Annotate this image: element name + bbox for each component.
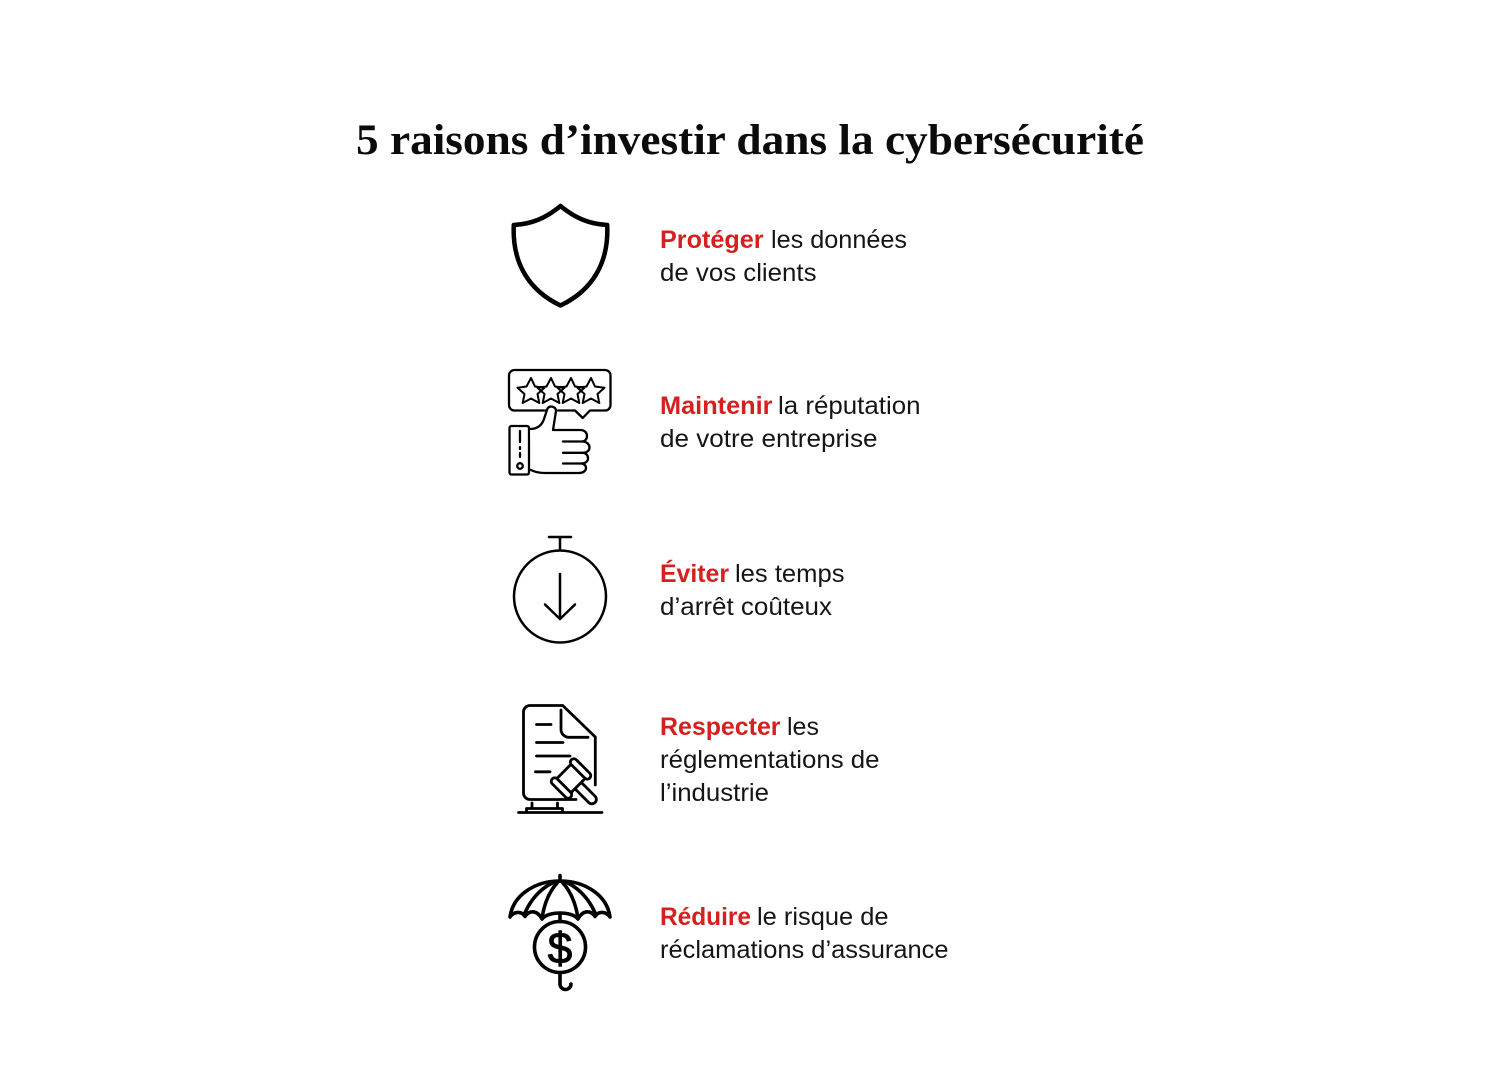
- text: avoid downtime: les temps: [735, 560, 844, 588]
- text: protect customer data: de vos clients: [660, 259, 816, 287]
- icon: legal document with gavel: [518, 706, 607, 815]
- text: protect customer data: les données: [771, 226, 907, 254]
- text: avoid downtime: Éviter: [660, 559, 729, 588]
- text: maintain reputation: la réputation: [778, 392, 920, 420]
- icon part: rating stars: [518, 378, 604, 403]
- text: comply with regulations: les: [787, 713, 819, 741]
- icon: stopwatch with down arrow: [514, 537, 606, 642]
- icon part: shirt cuff: [510, 426, 529, 474]
- text: avoid downtime: [660, 559, 844, 621]
- icon part: umbrella canopy: [510, 876, 610, 919]
- text: protect customer data: [660, 226, 907, 287]
- icon part: umbrella handle: [560, 973, 571, 990]
- text: reduce insurance claims: réclamations d’assurance: [660, 936, 948, 964]
- text: reduce insurance claims: Réduire: [660, 903, 751, 931]
- icon part: gavel: [550, 757, 607, 815]
- icon part: speech bubble: [509, 370, 610, 418]
- icon: umbrella over dollar coin: [510, 876, 610, 990]
- text: maintain reputation: Maintenir: [660, 392, 773, 420]
- text: comply with regulations: Respecter: [660, 713, 781, 741]
- icon part: dollar sign: $: [548, 924, 572, 973]
- text: reduce insurance claims: [660, 903, 948, 964]
- text: maintain reputation: [660, 392, 920, 453]
- text: avoid downtime: d’arrêt coûteux: [660, 593, 833, 621]
- title: 5 raisons d’investir dans la cybersécurité: [356, 117, 1144, 164]
- icon part: coin: [534, 922, 586, 972]
- text: protect customer data: Protéger: [660, 226, 764, 254]
- text: comply with regulations: réglementations de: [660, 746, 880, 774]
- icon: shield: [514, 206, 607, 306]
- text: comply with regulations: l’industrie: [660, 779, 769, 807]
- icon part: document: [524, 706, 595, 800]
- text: maintain reputation: de votre entreprise: [660, 425, 878, 453]
- icon: star rating and thumbs up: [509, 370, 610, 474]
- icon part: gavel base: [518, 803, 602, 812]
- icon part: thumbs up hand: [530, 407, 590, 473]
- text: reduce insurance claims: le risque de: [757, 903, 888, 931]
- text: comply with regulations: [660, 713, 880, 807]
